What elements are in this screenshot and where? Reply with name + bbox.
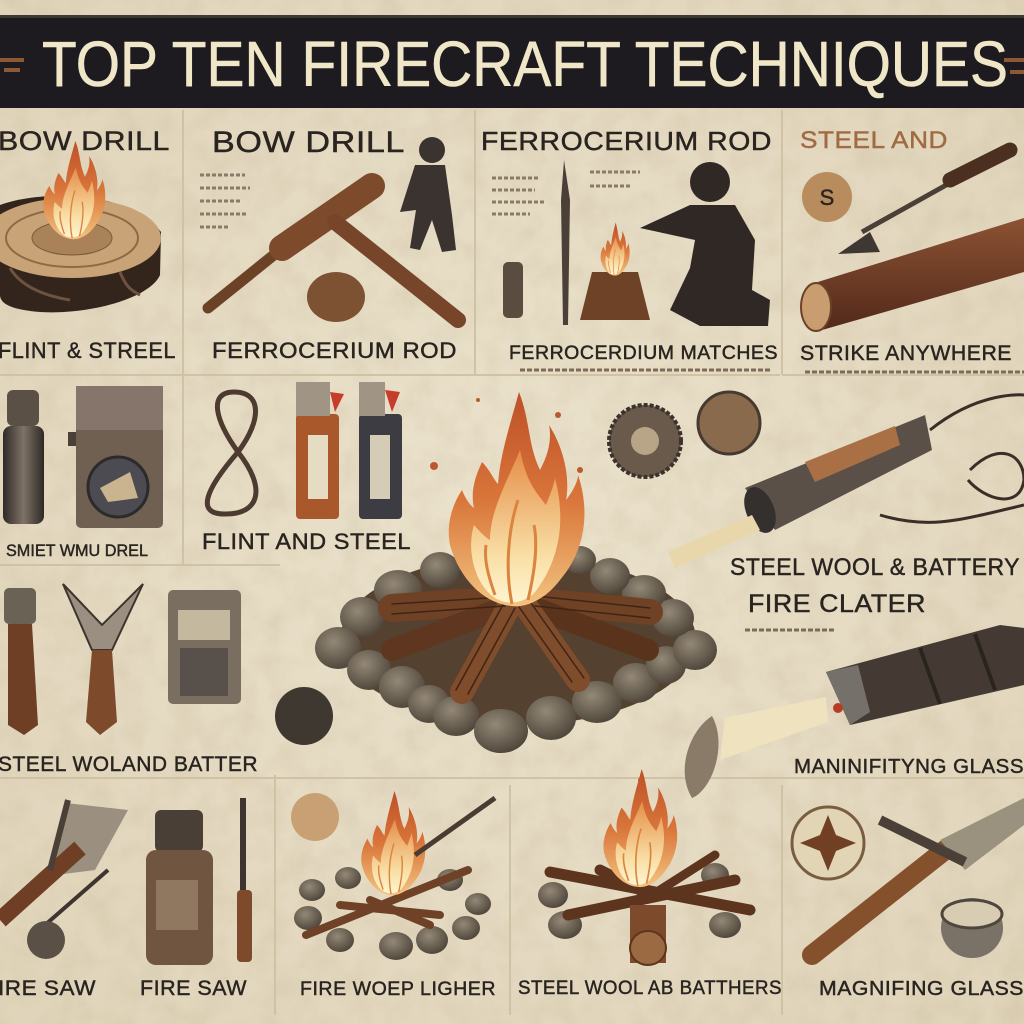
icon: tree stump <box>0 196 161 312</box>
label: SMIET WMU DREL <box>6 541 148 560</box>
stones <box>294 867 491 960</box>
label: STEEL WOOL & BATTERY <box>730 554 1020 581</box>
heading: STEEL AND <box>800 127 948 154</box>
panel: fire saw: FIRE SAW <box>140 977 247 1000</box>
icon: flame <box>603 769 677 887</box>
icon: compass badge <box>792 807 864 879</box>
panel: bow drill with stump <box>0 126 176 363</box>
panel: central campfire <box>315 392 717 782</box>
icon: orange lighter <box>296 382 344 519</box>
icon: flashlight tube <box>826 625 1024 725</box>
panel: gear and hand tools <box>609 392 760 477</box>
stones <box>538 863 741 939</box>
label: MANINIFITYNG GLASS <box>794 756 1024 778</box>
logs <box>550 855 750 915</box>
icon: axe tool <box>838 150 1010 254</box>
label: FIRE CLATER <box>748 590 926 618</box>
icon: light beam and spoon <box>685 697 828 798</box>
icon: flame <box>361 791 425 895</box>
title banner <box>0 15 1024 108</box>
heading: BOW DRILL <box>0 126 170 156</box>
panel: ferrocerium rod <box>481 126 778 370</box>
icon: tin box <box>168 590 241 704</box>
icon: log <box>801 218 1024 331</box>
label: STRIKE ANYWHERE <box>800 342 1012 365</box>
panel: bow drill sticks <box>200 126 458 363</box>
label: STEEL WOOL AB BATTHERS <box>518 978 782 999</box>
panel: steel and striker <box>800 127 1024 372</box>
panel: small campfire with stick <box>291 791 496 1000</box>
panel: row two left tools <box>3 386 163 560</box>
icon: jar <box>3 390 44 524</box>
ground <box>340 555 696 725</box>
panel: steel and striker: S <box>820 185 834 210</box>
icon: arrow head tool <box>63 584 143 735</box>
panel: steel wool and battery <box>668 395 1024 630</box>
icon: bottle <box>146 810 213 965</box>
label: FLINT AND STEEL <box>202 529 411 554</box>
front log <box>630 905 666 965</box>
icon: ring gear <box>609 405 681 477</box>
label: FLINT & STREEL <box>0 338 176 363</box>
icon: tinder nest <box>307 272 365 322</box>
logs <box>306 870 468 935</box>
icon: small tool <box>45 870 108 925</box>
panel: lighters <box>202 382 411 554</box>
small text <box>492 172 640 214</box>
icon: small stump fire <box>580 222 650 320</box>
stones <box>315 546 717 753</box>
icon: stone disc <box>275 687 333 745</box>
label: MAGNIFING GLASS <box>819 978 1024 1000</box>
icon: grey lighter <box>359 382 402 519</box>
sparks <box>430 398 642 782</box>
icon: knife <box>812 798 1024 955</box>
panel: magnifying glass <box>792 798 1024 1000</box>
icon: round stone <box>698 392 760 454</box>
panel: log fire <box>518 769 782 999</box>
icon: rod <box>561 160 570 325</box>
icon: coin <box>291 793 339 841</box>
icon: flame <box>43 141 105 239</box>
panel: fire saw <box>0 798 252 1000</box>
icon: person silhouette <box>400 137 456 252</box>
icon: figure-eight wire <box>207 392 256 514</box>
panel: magnifying glass tube <box>685 625 1024 798</box>
icon: brush handle <box>4 588 38 735</box>
icon: crossed sticks <box>208 186 458 320</box>
icon: torch stick <box>415 798 495 855</box>
small text <box>200 175 250 227</box>
icon: tin box <box>68 386 163 528</box>
label: FIRE WOEP LIGHER <box>300 979 496 1000</box>
label: FERROCERDIUM MATCHES <box>509 343 778 364</box>
icon: kneeling figure <box>640 162 770 326</box>
icon: thin brush <box>237 798 252 962</box>
icon: coin <box>802 172 852 222</box>
icon: saw hatchet <box>0 800 128 920</box>
label: FERROCERIUM ROD <box>212 338 457 363</box>
icon: metal ring <box>941 898 1003 958</box>
icon: fire starter tube <box>668 415 932 568</box>
icon: big flame <box>449 392 584 606</box>
label: STEEL WOLAND BATTER <box>0 753 258 776</box>
logs <box>392 596 650 694</box>
panel: row three tools <box>0 584 333 776</box>
icon: small bottle <box>503 262 523 318</box>
icon: cord <box>880 395 1024 522</box>
heading: FERROCERIUM ROD <box>481 126 772 156</box>
labels: IRE SAW <box>0 977 96 1000</box>
heading: BOW DRILL <box>212 126 405 159</box>
